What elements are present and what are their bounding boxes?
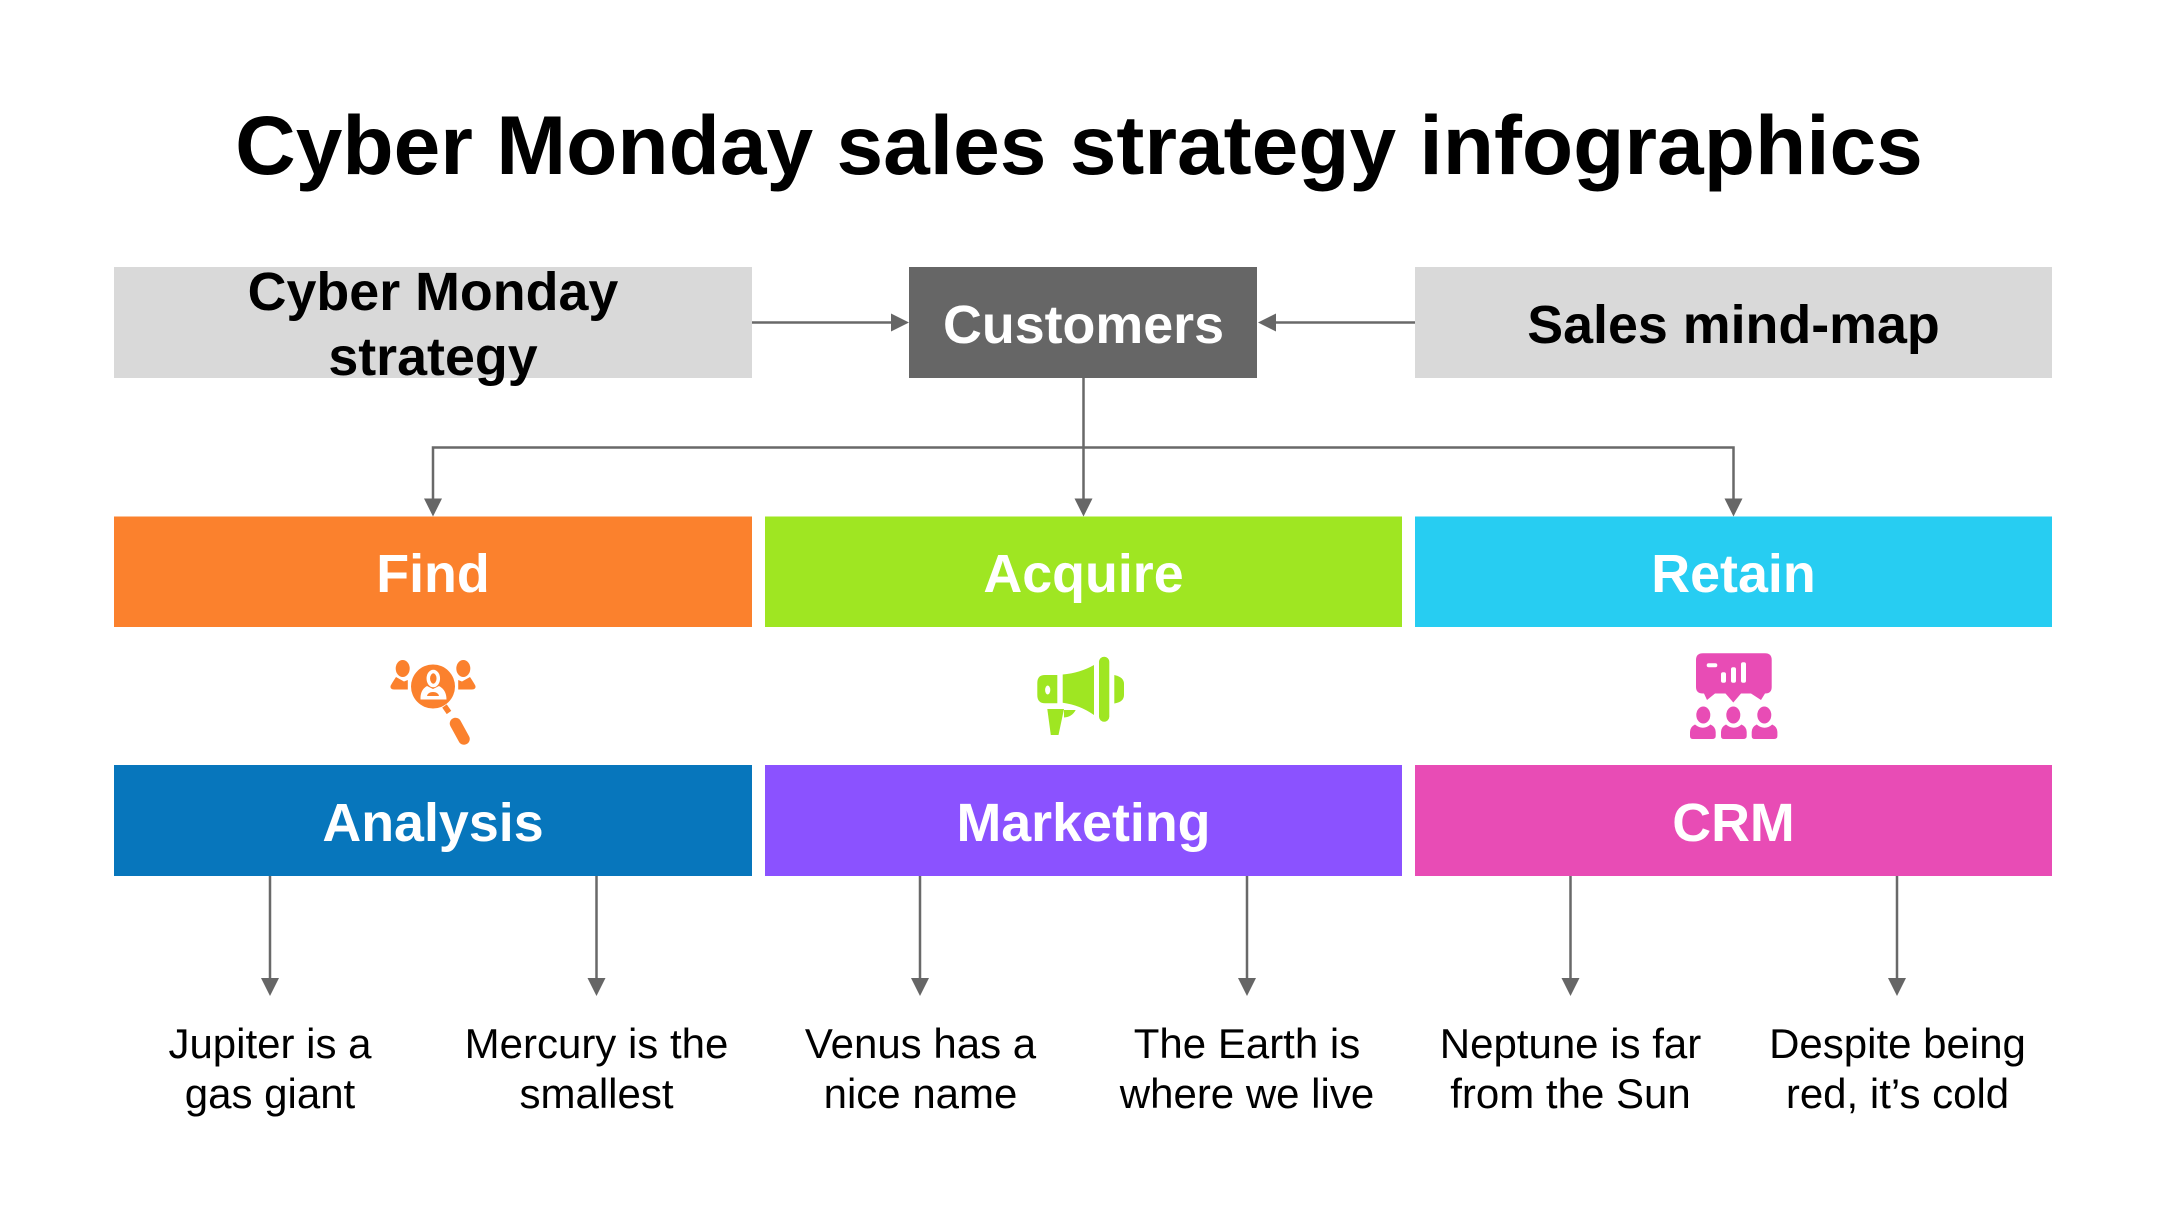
arrows: customers to find, acquire, retain xyxy=(424,378,1742,516)
text: Venus xyxy=(805,1020,1037,1117)
text: Earth xyxy=(1119,1020,1374,1117)
header: Marketing xyxy=(765,765,1402,876)
box: Sales mind-map xyxy=(1415,267,2052,378)
box: Cyber Monday strategy xyxy=(114,262,752,387)
text: Neptune xyxy=(1440,1020,1701,1117)
text: Neptune: from the Sun xyxy=(1450,1070,1691,1117)
header: Analysis: Analysis xyxy=(322,793,544,853)
text: Venus: Venus has a xyxy=(805,1020,1037,1067)
box: Customers: Customers xyxy=(943,295,1224,355)
header: Marketing: Marketing xyxy=(956,793,1211,853)
box: Cyber Monday strategy: Cyber Monday xyxy=(248,262,618,322)
icon: megaphone xyxy=(1037,657,1124,735)
text: Earth: The Earth is xyxy=(1134,1020,1360,1067)
text: Jupiter: gas giant xyxy=(185,1070,356,1117)
text: Neptune: Neptune is far xyxy=(1440,1020,1701,1067)
box: Sales mind-map: Sales mind-map xyxy=(1527,295,1940,355)
text: Mercury: smallest xyxy=(519,1070,674,1117)
header: Find: Find xyxy=(376,544,490,604)
header: CRM: CRM xyxy=(1672,793,1795,853)
icon: audience with chart bubble xyxy=(1690,653,1777,739)
icon: magnifier over people xyxy=(390,660,476,739)
header: Analysis xyxy=(114,765,752,876)
text: Jupiter: Jupiter is a xyxy=(168,1020,372,1067)
arrows: CRM column xyxy=(1562,876,1906,996)
text: Earth: where we live xyxy=(1119,1070,1374,1117)
arrows: Analysis column xyxy=(261,876,606,996)
text: Mercury xyxy=(465,1020,728,1117)
text: Venus: nice name xyxy=(824,1070,1017,1117)
text: Mars: red, it’s cold xyxy=(1786,1070,2009,1117)
header: Retain xyxy=(1415,516,2052,627)
header: Find xyxy=(114,516,752,627)
text: Mercury: Mercury is the xyxy=(465,1020,728,1067)
arrows: Marketing column xyxy=(911,876,1256,996)
arrow: mind-map to customers xyxy=(1258,314,1415,332)
text: Mars: Despite being xyxy=(1769,1020,2026,1067)
header: Acquire: Acquire xyxy=(983,544,1184,604)
text: Jupiter xyxy=(168,1020,372,1117)
box: Cyber Monday strategy: strategy xyxy=(328,327,538,387)
header: Acquire xyxy=(765,516,1402,627)
header: CRM xyxy=(1415,765,2052,876)
title: Cyber Monday sales strategy infographics xyxy=(235,98,1923,192)
header: Retain: Retain xyxy=(1651,544,1816,604)
text: Mars xyxy=(1769,1020,2026,1117)
arrow: strategy to customers xyxy=(752,314,909,332)
box: Customers xyxy=(909,267,1257,378)
